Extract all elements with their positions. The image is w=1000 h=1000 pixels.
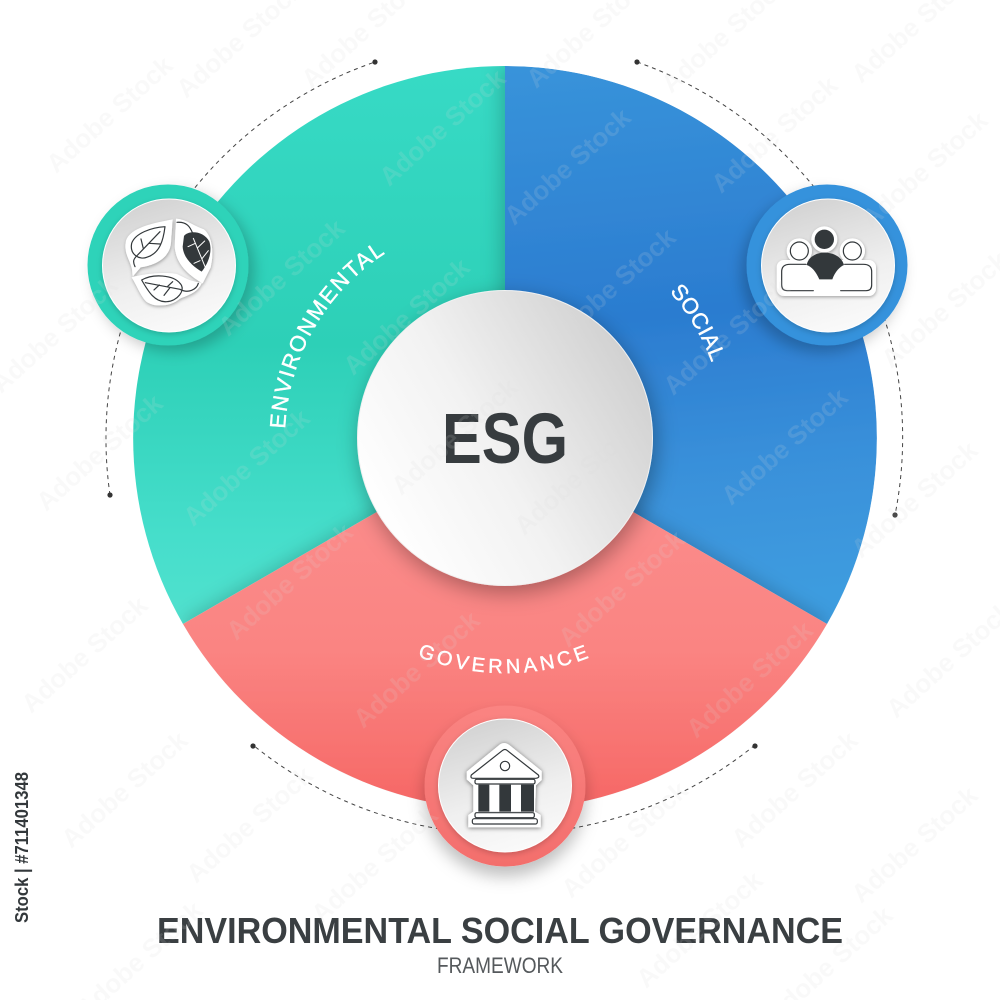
watermark: Adobe Stock (555, 775, 694, 904)
label: environmental: ENVIRONMENTAL (270, 245, 385, 428)
watermark: Adobe Stock (55, 725, 194, 854)
watermark: Adobe Stock (347, 605, 486, 734)
orbit end dots (107, 59, 898, 749)
watermark: Adobe Stock (15, 590, 154, 719)
watermark: Adobe Stock (373, 63, 512, 192)
watermark: Adobe Stock (715, 382, 854, 511)
subtitle: FRAMEWORK (437, 953, 563, 978)
icon: group of people (777, 226, 876, 296)
label: social: SOCIAL (672, 284, 723, 362)
watermark: Adobe Stock (543, 222, 682, 351)
title: ENVIRONMENTAL SOCIAL GOVERNANCE (157, 910, 843, 951)
watermark: Adobe Stock (725, 725, 864, 854)
watermark: Adobe Stock (845, 780, 984, 909)
panel: governance sector (182, 506, 828, 802)
watermark: Adobe Stock (845, 435, 984, 564)
watermark: Adobe Stock (630, 865, 769, 994)
icon badge: governance building (424, 706, 586, 866)
watermark: Adobe Stock (180, 760, 319, 889)
watermark: Adobe Stock (657, 272, 796, 401)
watermark: Adobe Stock (680, 615, 819, 744)
watermark: Adobe Stock (552, 524, 691, 653)
watermark: Adobe Stock (385, 372, 524, 501)
watermark: Adobe Stock (212, 213, 351, 342)
watermark: Adobe Stock (855, 105, 994, 234)
watermark: Adobe Stock (220, 517, 359, 646)
watermark: Adobe Stock (30, 388, 169, 517)
icon badge: social people (746, 184, 908, 346)
stock id side text: Stock | #711401348 (12, 772, 32, 923)
watermark: Adobe Stock (40, 50, 179, 179)
watermark: Adobe Stock (337, 252, 476, 381)
watermark: Adobe Stock (705, 70, 844, 199)
watermark: Adobe Stock (305, 800, 444, 929)
panel: environmental sector (133, 66, 505, 624)
label: governance: GOVERNANCE (420, 644, 589, 674)
watermark: Adobe Stock (498, 102, 637, 231)
watermark: Adobe Stock (177, 403, 316, 532)
watermark: Adobe Stock (508, 412, 647, 541)
panel: social sector (505, 66, 877, 624)
icon: institution building (467, 743, 542, 827)
dashed orbit arcs (106, 62, 903, 834)
icon badge: environmental leaves (88, 184, 248, 346)
center label ESG: ESG (442, 400, 568, 479)
center circle (358, 290, 652, 586)
icon: three leaves (125, 219, 212, 306)
